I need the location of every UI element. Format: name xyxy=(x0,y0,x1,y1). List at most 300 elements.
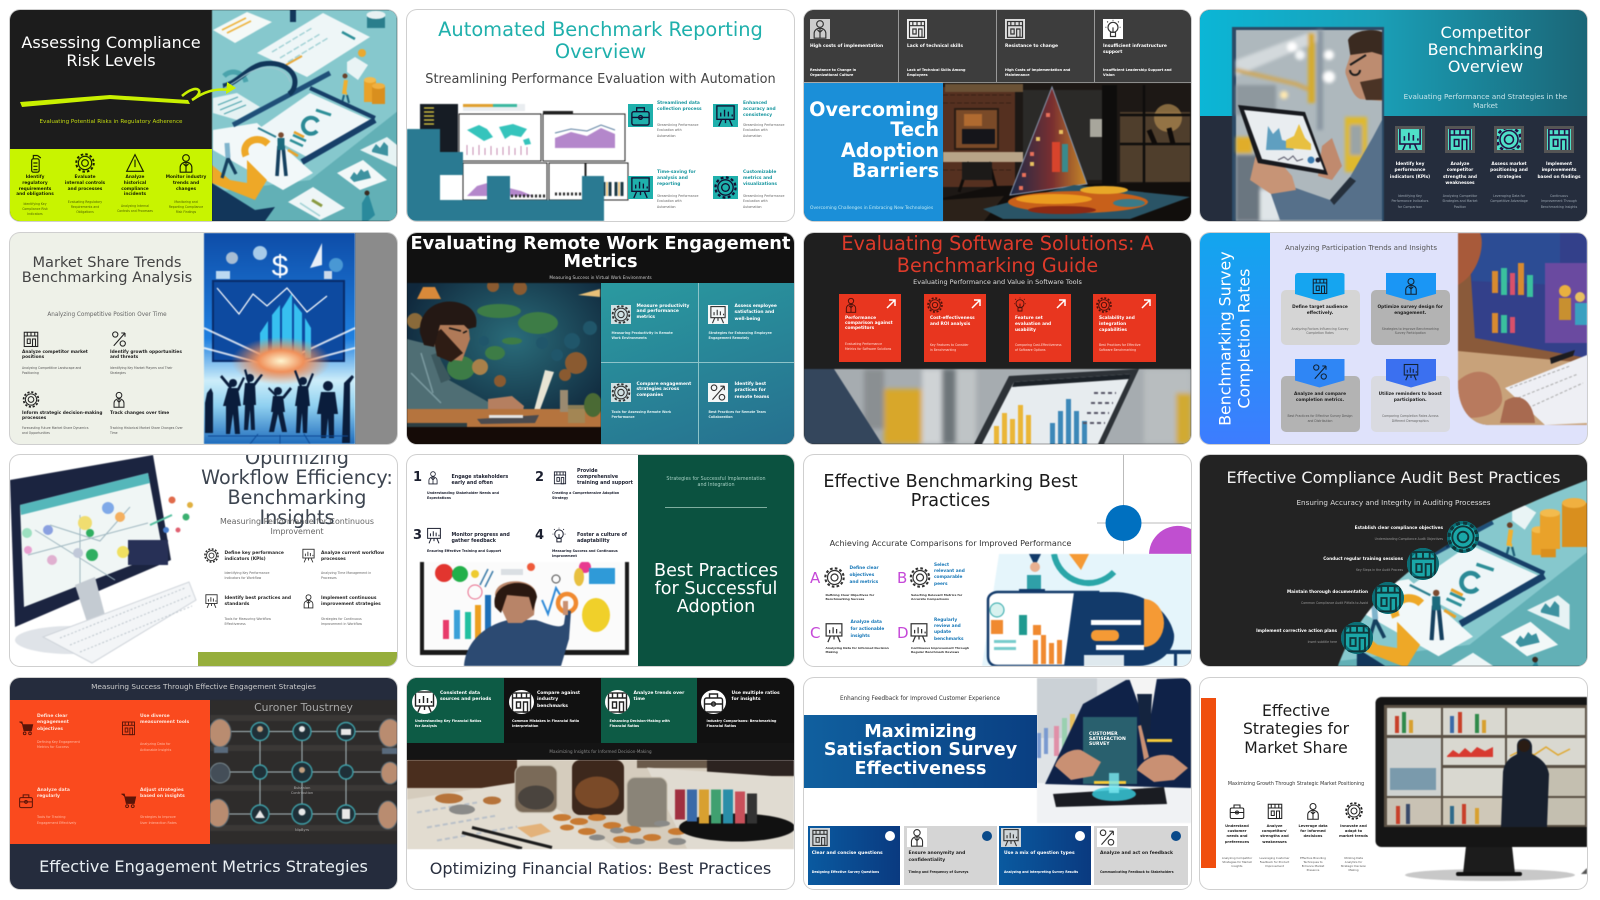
item: customer needs: preferences xyxy=(1225,840,1249,844)
panel: dark header: Maximizing Insights for Informed Decision-Making xyxy=(549,748,652,754)
item B: Select xyxy=(934,563,949,568)
title (overflowing top edge): Insights xyxy=(259,506,334,529)
item: best practices: practices for xyxy=(734,388,766,393)
photo caption text: SATISFACTION xyxy=(1089,737,1126,742)
item: infrastructure support: Insufficient infrastructure xyxy=(1103,44,1167,49)
icon xyxy=(1096,296,1112,314)
item A xyxy=(810,565,894,603)
icon xyxy=(204,548,219,563)
item: time-saving: analysis and xyxy=(657,176,688,181)
item: clear objectives: Metrics for Success xyxy=(37,745,69,749)
panel: blue title block: Overcoming xyxy=(809,98,939,121)
item card: feature set: usability xyxy=(1015,328,1036,333)
item: strategic decisions: processes xyxy=(22,416,46,421)
subtitle: Market xyxy=(1473,101,1498,110)
item: industry benchmarks: Compare against xyxy=(537,690,580,696)
item card: survey design: Optimize survey design for xyxy=(1378,304,1443,310)
item: growth opportunities: Identify growth opportunities xyxy=(110,350,182,354)
illustration: rising chart and celebrating silhouettes: $ xyxy=(272,250,289,282)
item: streamlined data collection: Evaluation with xyxy=(657,128,682,132)
panel: Optimizing Financial Ratios xyxy=(407,678,794,888)
item: technical skills xyxy=(899,10,997,82)
item card: feature set: Feature set xyxy=(1015,316,1043,321)
panel: Effective Engagement Metrics Strategies xyxy=(10,678,397,888)
item card: feature set: Comparing Cost-Effectiveness xyxy=(1015,343,1062,347)
item: customer needs: Insights xyxy=(1232,864,1242,868)
item: key performance indicators: Identifying Key xyxy=(1398,194,1422,198)
item: market positioning xyxy=(1490,126,1528,203)
panel: orange strategies xyxy=(10,700,210,844)
item D: Continuous Improvement Through xyxy=(911,646,969,650)
item: strategic decisions: Forecasting Future Market Share Dynamics xyxy=(22,426,88,430)
item card: feature set xyxy=(1009,294,1071,362)
panel: blue title block: Satisfaction Survey xyxy=(824,740,1017,760)
item: analyze data: Analyze data xyxy=(37,788,70,792)
item card: scalability: Scalability and xyxy=(1099,316,1135,321)
item 4 xyxy=(535,527,635,561)
icon xyxy=(1544,126,1574,153)
item D: review and xyxy=(934,624,961,629)
item: internal controls: Requirements and xyxy=(71,205,99,209)
item: current processes xyxy=(301,548,393,584)
item: informed decisions xyxy=(1294,802,1332,872)
item C xyxy=(810,619,894,655)
item D xyxy=(897,618,981,655)
item: clear objectives: objectives xyxy=(37,727,63,732)
item: engagement strategies: Compare engagement xyxy=(636,382,691,386)
icon: shop xyxy=(119,720,138,736)
item: documentation xyxy=(1268,582,1404,614)
item: market trends xyxy=(1334,802,1372,872)
blue side band with rotated title: Benchmarking Survey xyxy=(1215,251,1234,425)
item: best practices: Collaboration xyxy=(708,414,733,418)
item 2: Creating a Comprehensive Adoption xyxy=(552,491,619,495)
title: Benchmarking Guide xyxy=(897,254,1098,276)
item: training sessions: Conduct regular training sessions xyxy=(1323,556,1403,561)
item card: cost-effectiveness: Key Features to Consider xyxy=(930,343,969,347)
item: internal controls: Evaluate xyxy=(74,175,96,180)
item B xyxy=(897,563,981,603)
title: Practices xyxy=(911,491,990,511)
subtitle: Evaluating Performance and Value in Software Tools xyxy=(913,278,1082,286)
panel: blue title block: Adoption xyxy=(841,139,939,162)
subtitle: Maximizing Growth Through Strategic Market Positioning xyxy=(1228,782,1364,786)
item: clear objectives: engagement xyxy=(37,720,69,725)
item: regulatory requirements: Identify xyxy=(26,175,44,180)
item: best practices: Identify best practices and xyxy=(224,596,291,601)
item: industry trends: Monitor industry xyxy=(166,175,206,180)
item: satisfaction xyxy=(708,304,777,340)
item: enhanced accuracy: consistency xyxy=(743,113,772,118)
icon tab xyxy=(1386,272,1436,301)
item A: Defining Clear Objectives for xyxy=(826,593,874,597)
icon xyxy=(1012,296,1028,314)
item: key performance indicators: performance xyxy=(1395,168,1425,173)
item card: target audience: Analyzing Factors Influencing Survey xyxy=(1292,326,1348,330)
card: clear questions: Designing Effective Survey Questions xyxy=(812,870,879,874)
item: competitor strengths: competitor xyxy=(1447,168,1473,173)
item 2: Strategy xyxy=(552,496,568,500)
item: continuous improvement: Strategies for Continuous xyxy=(321,616,362,620)
icon xyxy=(1103,19,1123,39)
card: act on feedback xyxy=(1094,826,1188,885)
icon xyxy=(843,296,859,314)
icon xyxy=(1395,126,1425,153)
item card: reminders xyxy=(1371,359,1450,432)
item: implement improvements: Continuous xyxy=(1550,194,1568,198)
item: compliance objectives: Understanding Compliance Audit Objectives xyxy=(1375,536,1443,540)
item: competitor strengths xyxy=(1442,126,1478,209)
item: customer needs: Strategies for Market xyxy=(1222,860,1252,864)
item: KPIs: Identifying Key Performance xyxy=(224,570,269,574)
title: Effective Compliance Audit Best Practices xyxy=(1227,468,1560,487)
item: internal controls xyxy=(65,153,105,214)
item 1 xyxy=(413,467,529,503)
item: current processes: Analyzing Time Management in xyxy=(321,570,371,574)
panel: blue title block: Tech xyxy=(890,118,939,141)
item: compliance incidents: incidents xyxy=(124,192,146,197)
panel: blue title block xyxy=(804,83,943,221)
icon tab xyxy=(1294,359,1344,388)
title (overflowing top edge) xyxy=(199,448,395,528)
item: training sessions: Key Steps in the Audit Process xyxy=(1356,568,1403,572)
item: infrastructure support: support xyxy=(1103,50,1122,55)
item: customizable metrics: visualizations xyxy=(743,182,777,187)
item: high costs xyxy=(804,10,899,82)
panel: blue title block: Maximizing xyxy=(864,722,977,742)
item: market trends: Analytics for xyxy=(1345,860,1362,864)
icon: devices xyxy=(16,792,36,808)
item: internal controls: internal controls xyxy=(65,181,105,186)
item: growth opportunities: Strategies xyxy=(110,370,126,374)
item: resistance to change: High Costs of Implementation and xyxy=(1005,68,1070,72)
item: internal controls: Obligations xyxy=(76,210,94,214)
item: industry trends: Monitoring and xyxy=(174,200,198,204)
icon xyxy=(24,332,38,348)
photo: businessman with survey tablet xyxy=(1037,678,1191,822)
item: regulatory requirements xyxy=(16,154,54,216)
item: implement improvements xyxy=(1537,126,1580,209)
icon xyxy=(112,331,126,347)
item: streamlined data collection: collection process xyxy=(657,107,702,112)
diagram label: Bukanion xyxy=(294,786,310,790)
item: continuous improvement: Implement continuous xyxy=(321,596,376,601)
decoration: lines, blue circle, purple half circle xyxy=(1094,455,1191,560)
item: market positioning: Leveraging Data for xyxy=(1493,194,1525,198)
panel: blue title block xyxy=(804,714,1037,788)
icon xyxy=(1264,802,1284,820)
item: customer needs xyxy=(1218,802,1256,872)
card: anonymity xyxy=(904,826,996,885)
panel: Evaluating Remote Work Engagement Metrics xyxy=(407,232,794,444)
item card: scalability: Best Practices for Effective xyxy=(1099,343,1141,347)
item: KPIs: Define key performance xyxy=(224,550,284,556)
icon xyxy=(708,304,728,324)
item card: target audience: effectively. xyxy=(1307,310,1333,316)
icon xyxy=(823,567,846,588)
item: competitor strengths: Analyze xyxy=(1450,162,1469,167)
item card: target audience xyxy=(1281,273,1360,345)
panel: Automated Benchmark Reporting Overview xyxy=(407,10,794,221)
item: time-saving: Automation xyxy=(657,205,676,209)
item: consistent data: Consistent data xyxy=(440,690,480,696)
item: adjust strategies: Adjust strategies xyxy=(140,788,184,792)
item: customer needs: customer xyxy=(1228,829,1246,833)
item: customizable metrics: metrics and xyxy=(743,176,772,181)
title xyxy=(804,232,1191,276)
item: market trends: Innovate and xyxy=(1340,824,1367,828)
item: productivity xyxy=(611,304,690,340)
subtitle: Enhancing Feedback for Improved Customer Experience xyxy=(840,696,1000,702)
icon xyxy=(823,622,845,643)
item: analyze data xyxy=(16,788,112,826)
item: best practices: Identify best xyxy=(734,382,766,386)
icon xyxy=(22,391,40,408)
subtitle: Improvement xyxy=(270,527,324,536)
panel: blue title block: Overcoming Challenges in Embracing New Technologies xyxy=(810,206,933,211)
item card: cost-effectiveness xyxy=(924,294,986,362)
photo caption text xyxy=(1089,732,1126,748)
item: technical skills: Lack of Technical Skills Among xyxy=(907,68,965,72)
item: multiple ratios: Use multiple ratios xyxy=(732,690,780,696)
panel: blue title block: Barriers xyxy=(852,159,939,182)
item: regulatory requirements: Compliance Risk xyxy=(22,207,48,211)
item: competitor strengths xyxy=(1256,802,1294,872)
title xyxy=(438,18,763,63)
item: clear objectives: Define clear xyxy=(37,714,67,718)
panel: metrics grid xyxy=(600,282,794,444)
card: anonymity: Timing and Frequency of Surveys xyxy=(908,870,968,874)
icon xyxy=(604,690,630,714)
panel: Maximizing Satisfaction Survey Effectiveness xyxy=(804,678,1191,888)
subtitle: Measuring Success Through Effective Engagement Strategies xyxy=(91,682,316,690)
icon xyxy=(610,382,630,402)
item: enhanced accuracy: Streamlining Performance xyxy=(743,123,784,127)
item: time-saving: Streamlining Performance xyxy=(657,194,698,198)
item card: completion metrics xyxy=(1281,359,1360,432)
item D: Regular Benchmark Reviews xyxy=(911,650,959,654)
item: competitor strengths: Analyzing Competitor xyxy=(1443,194,1477,198)
item D: benchmarks xyxy=(934,637,964,642)
item: technical skills: Employees xyxy=(907,73,928,77)
photo: analyst with tablet in a factory xyxy=(1231,26,1384,221)
item: continuous improvement: Improvement in Workflow xyxy=(321,622,362,626)
icon xyxy=(551,470,569,485)
item card: performance comparison: competitors xyxy=(845,326,874,331)
icon xyxy=(927,296,943,314)
item: competitor positions: Analyze competitor market xyxy=(22,350,88,354)
item card: survey design: Strategies to Improve Benchmarking xyxy=(1382,326,1439,330)
item: satisfaction: well-being xyxy=(734,316,760,322)
panel: Evaluating Software Solutions xyxy=(804,232,1191,444)
item: compliance incidents: historical xyxy=(124,181,146,186)
diagram label: NipByrs xyxy=(295,828,309,832)
card: clear questions: Clear and concise questions xyxy=(812,851,883,856)
item: streamlined data collection: Automation xyxy=(657,134,676,138)
item card: performance comparison: Performance xyxy=(845,316,876,321)
item: satisfaction: Assess employee xyxy=(734,304,777,308)
item: track changes xyxy=(110,392,183,434)
item: multiple ratios: Industry Comparisons: Benchmarking xyxy=(706,719,776,723)
item: measurement tools xyxy=(119,714,209,752)
title: Assessing Compliance xyxy=(21,32,201,52)
item: competitor strengths: strengths and xyxy=(1260,834,1289,838)
title: Market Share Trends xyxy=(32,254,182,270)
item 3 xyxy=(413,527,529,557)
item: market positioning: Assess market xyxy=(1491,162,1527,167)
item: market positioning: positioning and xyxy=(1490,168,1528,173)
arrow xyxy=(886,299,896,309)
item: competitor strengths: weaknesses xyxy=(1262,840,1287,844)
item 2: 2 xyxy=(535,470,544,485)
blue side band with rotated title xyxy=(1200,232,1270,444)
icon xyxy=(426,468,440,487)
panel: green title block: and Integration xyxy=(698,482,734,488)
item: productivity: Work Environments xyxy=(612,336,647,340)
item C: C xyxy=(810,624,820,642)
panel: blue title block: Effectiveness xyxy=(855,758,986,778)
item: adjust strategies: Strategies to Improve xyxy=(140,814,176,818)
item: measurement tools: Actionable Insights xyxy=(140,748,171,752)
icon xyxy=(701,690,726,714)
item: multiple ratios xyxy=(697,678,794,742)
icon xyxy=(610,304,630,324)
item card: performance comparison: comparison against xyxy=(845,321,893,326)
title: Metrics xyxy=(563,250,638,272)
icon xyxy=(908,622,930,643)
icon xyxy=(550,527,568,544)
item: engagement strategies: companies xyxy=(636,393,663,398)
item B: peers xyxy=(934,582,948,587)
item: KPIs: indicators (KPIs) xyxy=(224,556,266,562)
item: competitor strengths: Leveraging Customer xyxy=(1259,856,1290,860)
panel: Overcoming Tech Adoption Barriers xyxy=(804,10,1191,221)
item: high costs: Resistance to Change in xyxy=(810,68,856,72)
icon xyxy=(810,828,830,846)
item: strategic decisions: and Opportunities xyxy=(22,430,50,434)
panel: barrier columns xyxy=(804,10,1191,83)
card: clear questions xyxy=(808,826,900,885)
item: strategic decisions: Inform strategic decision-making xyxy=(22,411,102,416)
panel: green title block: for Successful xyxy=(655,579,777,599)
title xyxy=(1216,702,1376,758)
item 4: 4 xyxy=(535,528,544,543)
panel: green title block: Best Practices xyxy=(654,561,778,581)
item: competitor strengths: Position xyxy=(1454,205,1466,209)
item: customizable metrics: Automation xyxy=(743,205,762,209)
item: market trends: market trends xyxy=(1339,834,1368,838)
teal header band xyxy=(1200,10,1587,116)
item: consistent data: for Analysis xyxy=(415,724,437,728)
item: industry benchmarks: Common Mistakes in Financial Ratio xyxy=(512,719,579,723)
title: Overview xyxy=(1448,57,1523,76)
item card: scalability: integration xyxy=(1099,322,1126,327)
item B: relevant and xyxy=(934,569,965,574)
icon xyxy=(1341,622,1373,654)
title: Risk Levels xyxy=(66,51,156,70)
panel: Effective Strategies for Market Share xyxy=(1200,678,1587,888)
photo: man on laptop with world map behind xyxy=(407,282,601,444)
item: industry trends: trends and xyxy=(173,181,199,186)
panel: Effective Benchmarking Best Practices xyxy=(804,455,1191,666)
title: Strategies for xyxy=(1243,720,1349,738)
icon xyxy=(114,392,124,408)
item: productivity: metrics xyxy=(636,315,655,320)
item: competitor strengths: competitors' xyxy=(1262,829,1287,833)
item 3: 3 xyxy=(413,528,422,543)
title: Effective Engagement Metrics Strategies xyxy=(39,856,368,876)
item: analyze data: Tools for Tracking xyxy=(37,814,65,818)
item: multiple ratios: for insights xyxy=(732,697,761,702)
item: documentation: Common Compliance Audit Pitfalls to Avoid xyxy=(1301,600,1368,604)
item: satisfaction: satisfaction and xyxy=(734,310,774,315)
item: consistent data xyxy=(407,678,504,742)
item C: for actionable xyxy=(850,627,884,632)
photo: analyst typing in front of charts xyxy=(1457,233,1587,426)
item: customizable metrics: Evaluation with xyxy=(743,199,768,203)
item: informed decisions: decisions xyxy=(1304,834,1322,838)
item B: Accurate Comparisons xyxy=(911,597,949,601)
icon: extinguisher xyxy=(31,154,42,173)
item: competitor positions: Analyzing Competitive Landscape and xyxy=(22,366,81,370)
icon xyxy=(810,19,830,39)
item: time-saving xyxy=(628,170,698,209)
title: Automated Benchmark Reporting xyxy=(438,18,763,41)
item: regulatory requirements: regulatory xyxy=(22,181,48,186)
item: market trends: Strategic Decision xyxy=(1341,864,1366,868)
icon xyxy=(628,104,653,127)
item: market positioning: Competitive Advantage xyxy=(1490,199,1528,203)
item card: reminders: Utilize reminders to boost xyxy=(1379,392,1442,397)
title xyxy=(1428,23,1543,76)
blue side band with rotated title: Completion Rates xyxy=(1234,268,1253,408)
item: key performance indicators: indicators (KPIs) xyxy=(1390,175,1430,180)
item: informed decisions: Leverage data xyxy=(1298,824,1328,828)
icon xyxy=(1445,126,1475,153)
icon: gear head xyxy=(75,153,95,173)
arrow xyxy=(971,299,981,309)
item: customizable metrics: Streamlining Performance xyxy=(743,194,784,198)
icon xyxy=(713,104,738,127)
icon xyxy=(412,690,437,714)
diagram: customer journey network xyxy=(210,700,397,844)
item card: completion metrics: and Distribution xyxy=(1308,419,1332,423)
item: best practices: remote teams xyxy=(734,394,769,400)
subtitle xyxy=(199,517,395,537)
item card: feature set: evaluation and xyxy=(1015,322,1051,327)
icon xyxy=(708,382,728,402)
brush stroke and arrow xyxy=(20,82,236,107)
title xyxy=(804,473,1097,511)
photo: laptop with bar charts in a factory xyxy=(804,368,1191,444)
item: strategic decisions xyxy=(22,391,102,434)
panel: green title block: Strategies for Successful Implementation xyxy=(666,477,766,482)
icon xyxy=(1227,802,1247,820)
subtitle: Analyzing Participation Trends and Insights xyxy=(1285,242,1437,252)
item: growth opportunities: and threats xyxy=(110,354,138,360)
icon xyxy=(1097,828,1117,846)
item: consistent data: Understanding Key Financial Ratios xyxy=(415,719,481,723)
item: market positioning: strategies xyxy=(1497,175,1521,180)
item: compliance objectives: Establish clear compliance objectives xyxy=(1355,525,1443,530)
item: best practices: Best Practices for Remote Team xyxy=(708,410,766,414)
card: act on feedback: Analyze and act on feedback xyxy=(1100,851,1173,856)
item: competitor positions: Positioning xyxy=(22,370,39,374)
item card: scalability xyxy=(1093,294,1156,362)
panel: green title block xyxy=(638,455,794,666)
item: growth opportunities: Identifying Key Market Players and Their xyxy=(110,366,173,370)
item card: feature set: of Software Options xyxy=(1015,348,1046,352)
